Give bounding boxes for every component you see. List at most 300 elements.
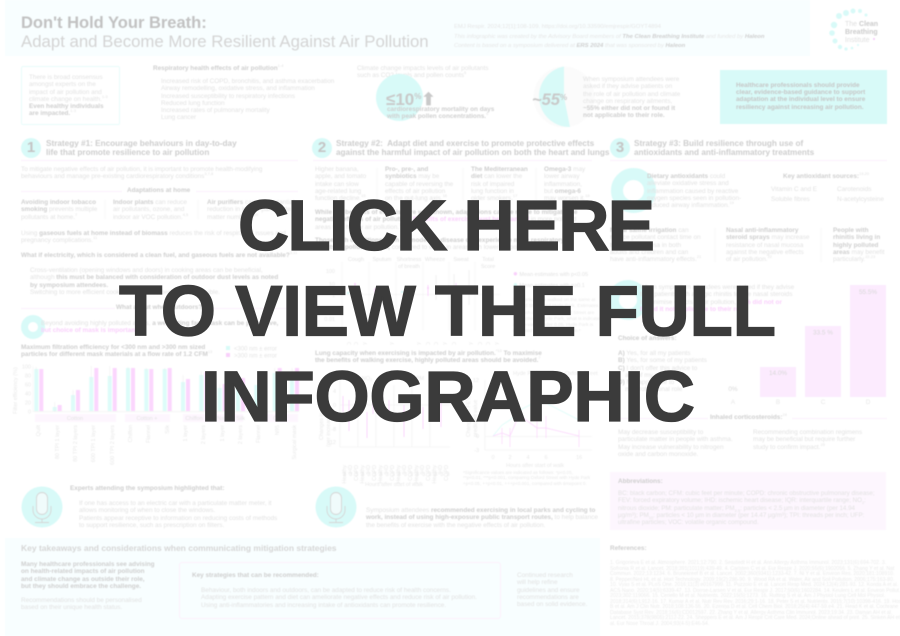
purifiers: Air purifiers cause substantial: [207, 199, 294, 206]
key takeaways band: [5, 538, 600, 636]
FEV change chart: IHD: [420, 465, 426, 474]
abbreviations text: FEV: forced expiratory volume; IHD: ischemic heart disease; IQR: interquartile range; NO2:: [618, 497, 866, 506]
urban symptoms text: Those with conditions such as moderate disease can experience more respiratory: [315, 237, 564, 244]
attendee question: [583, 76, 680, 119]
takeaways personalised text: Recommendations should be personalised: [21, 597, 142, 604]
strategy 3 heading: [634, 139, 814, 157]
citation text: EMJ Respir. 2024;12[1]:108-109. https://doi.org/10.33590/emjrespir/GOYT4894: [454, 24, 661, 30]
abbreviations text: nitrous dioxide; PM: particulate matter; PM2.5: particles < 2.5 µm in diameter (per 14.94: [618, 505, 855, 513]
key strategies list: Adapting exercise pattern and diet can ameliorate negative effects and reduce risk of air pollution.: [201, 594, 477, 601]
dietary antioxidants: inflammation caused by reactive: [647, 188, 738, 195]
mask chart: Chiffon: [185, 416, 203, 422]
antioxidant sources list 2: Carotenoids: [837, 186, 871, 193]
symptom footnote: Oxford Street and Hyde Park. Estimates: [513, 304, 598, 309]
symptom chart axis: [324, 269, 335, 323]
strategy 2 heading: Strategy #2: Adapt diet and exercise to promote protective effects: [336, 139, 594, 148]
probiotics: on the gut-lung axis.16: [385, 193, 447, 202]
antioxidant sources list 2: [837, 185, 884, 205]
FEV change chart: NO: [362, 376, 370, 382]
answer categories: [731, 399, 871, 406]
takeaways bold text: Many healthcare professionals see advising: [21, 561, 155, 568]
hours line chart: [466, 371, 598, 469]
consensus text: [29, 74, 108, 117]
symptom footnote: indicated as an alternative site.*: [513, 329, 581, 334]
answers heading: Choice of answers:: [618, 335, 677, 342]
symposium recommendation: Symposium attendees recommended exercising in local parks and cycling to: [366, 507, 595, 514]
FEV change chart: IHD: [438, 465, 444, 474]
steroid question: [640, 284, 794, 313]
callout text: resiliency against increasing air pollution.: [736, 104, 864, 111]
mediterranean diet: [471, 166, 528, 202]
mask chart labels: 80 TPI 1 layer: [55, 425, 61, 459]
takeaways bold text: on health-related impacts of air pollution: [21, 568, 145, 575]
continued research: recommendations are: [517, 594, 579, 601]
symptom chart headers: of breath: [398, 264, 420, 270]
references text: 8. Pepper/Neil HL et al. Hort Technology. 2009;19(2):286-90. 9. Wood RA et al. Water, Air and Soil Pollution. 2006;175:163-80.: [610, 576, 894, 582]
references text: 10. Vyas S et al. PLoS One. 2016;11(3):e0167999. 11. Puzzolo E et al. Lancet Resp Med. 2024;12(4):281-93. 12. Konda A et al.: [610, 582, 898, 588]
fruit intake: function decline.15: [315, 193, 366, 202]
strategy 3 number: 3: [616, 139, 624, 156]
answer values: 33.5 %: [813, 330, 833, 336]
takeaways bold text: and climate change as outside their role,: [21, 576, 145, 583]
answer categories: B: [776, 399, 780, 406]
symposium recommendation: [366, 507, 598, 529]
mask chart heading: [21, 344, 212, 358]
probiotics: effects of air pollution: [385, 188, 445, 195]
lung charts: [319, 371, 598, 488]
probiotics: capable of reversing the: [385, 181, 453, 188]
plants: Indoor plants can reduce: [113, 199, 187, 206]
attendee question: not applicable to their role.: [583, 112, 665, 119]
mask chart labels: 80 TPI 2 layers: [73, 425, 79, 462]
FEV change chart: IHD: [348, 465, 354, 474]
strategy 3 number: [610, 138, 630, 158]
references text: Sofronia R et al. Lancet. 2018;391(10119):439-49. 4. Carlsten C et al. Eur Respir J. 2020;55(6):1902056. 5. Zhang Y et al. Nat: [610, 566, 894, 572]
FEV change chart: Healthy: [342, 465, 348, 484]
respiratory effects list: Increased rates of pulmonary mortality: [161, 107, 270, 114]
symptom chart points: [355, 283, 456, 296]
references text: [610, 561, 900, 627]
strategy 1 intro: [21, 166, 262, 180]
mask chart labels: 2 layers: [238, 425, 244, 444]
lung capacity heading: [315, 348, 542, 364]
exercise text: [314, 209, 578, 231]
hours line chart: Oxford Street: [565, 371, 598, 377]
answers list: C) I don't offer this advice to: [618, 365, 697, 372]
mask chart labels: 600 TPI 2 layers: [110, 425, 116, 465]
answer categories: A: [731, 399, 736, 406]
electricity list: although this must be balanced with consideration of outdoor dust levels as noted: [30, 274, 278, 281]
FEV change chart: IHD: [366, 465, 372, 474]
key strategies heading: Key strategies that can be recommended:: [192, 572, 319, 579]
FEV change chart: COPD: [408, 465, 414, 481]
citation text: Content is based on a symposium delivered at ERS 2024 that was sponsored by Haleon: [454, 43, 685, 49]
mask chart axis: 0: [28, 410, 31, 416]
omega: inflammation,: [544, 181, 582, 188]
FEV change chart: PM: [416, 376, 425, 382]
mask chart labels: Silk: [165, 425, 171, 434]
tobacco: smoking prevents multiple: [21, 206, 97, 213]
respiratory effects list: [161, 78, 334, 121]
mask chart error bars: [33, 366, 299, 412]
corticosteroids note: [753, 429, 862, 451]
FEV change chart: -4: [331, 417, 336, 423]
abbreviations text: [618, 490, 875, 526]
references heading: References:: [610, 545, 647, 552]
references text: Lancet. 2015;378(9805):2112-22. 24. Sheppers E et al. Am J Respir Crit Care Med. 2024;Online ahead of print. 25. Sinken AH et: [610, 615, 900, 621]
corticosteroids list: [618, 429, 733, 458]
mask chart labels: Flannel: [256, 425, 262, 443]
answers list: A) Yes, for all my patients: [618, 350, 690, 357]
symptom chart axis: 100: [326, 269, 335, 275]
answer values: [728, 289, 877, 393]
symposium recommendation: work, instead of using high-exposure public transport routes, to help balance: [366, 514, 598, 521]
mask chart heading: particles for different mask materials at a flow rate of 1.2 CFM13: [21, 349, 212, 358]
corticosteroids note: Recommending combination regimens: [753, 429, 862, 436]
corticosteroids note: may be beneficial but require further: [753, 436, 855, 443]
mask text: [41, 320, 278, 334]
mask chart axis: [13, 364, 31, 416]
strategy 1 heading: life that promote resilience to air pollution: [46, 148, 209, 157]
corticosteroids list: particulate matter in people with asthma.: [618, 436, 733, 443]
nasal steroid: [726, 227, 809, 263]
symptom chart axis: 1: [332, 293, 335, 299]
mask chart axis: 60: [25, 382, 31, 388]
nasal saline: reduce pollutant contact time on: [610, 234, 701, 241]
takeaways personalised text: [21, 597, 142, 612]
hours line chart: -3: [474, 448, 479, 454]
FEV change chart: IHD: [402, 465, 408, 474]
FEV change chart: COPD: [426, 465, 432, 481]
FEV change chart: Healthy: [414, 465, 420, 484]
continued research: guidelines and ensure: [517, 587, 580, 594]
dietary antioxidants: oxygen species seen in pollution-: [647, 195, 741, 202]
antioxidant sources heading: Key antioxidant sources:19,20: [783, 171, 869, 180]
strategy 2 heading: [336, 139, 610, 157]
hours line chart: 16: [576, 455, 582, 461]
FEV change chart: IHD: [384, 465, 390, 474]
dietary antioxidants: induced airway inflammation.19: [647, 200, 734, 209]
attendee question: the role of air pollution and climate: [583, 91, 680, 98]
electricity list: [30, 267, 278, 296]
consensus text: amongst experts on the: [29, 81, 96, 88]
logo: Breathing: [845, 29, 878, 36]
purifiers: matter numbers.10: [207, 211, 258, 221]
climate text: Climate change impacts levels of air pollutants: [357, 65, 488, 72]
FEV change chart: (per increase): [326, 413, 332, 447]
panel: abbreviations: [610, 472, 886, 530]
FEV change chart: -8: [331, 427, 336, 433]
rhinitis: [833, 227, 885, 263]
steroid question: to minimise effects of air pollution, 89% did not or: [640, 299, 782, 306]
hours line chart: Hyde Park: [513, 371, 539, 377]
steroid question: When symposium attendees were asked if they advise: [640, 284, 794, 291]
strategy 3 heading: Strategy #3: Build resilience through use of: [634, 139, 803, 148]
takeaways bold text: [21, 561, 155, 590]
experts list: If one has access to an electric car with a particulate matter meter, it: [79, 500, 272, 507]
mask chart axis: 20: [25, 400, 31, 406]
antioxidant sources list: [771, 185, 817, 205]
symptom footnote: *All participants walked on the same at: [513, 298, 595, 303]
symptom chart headers: Score: [481, 264, 495, 270]
answers list: any of my patients: [625, 372, 677, 379]
mask ring: [21, 315, 45, 339]
pollen stat: ≤10%⬆: [386, 90, 436, 109]
antioxidant ring: [611, 168, 656, 213]
pollen circle: [376, 74, 423, 121]
mask chart labels: 2 layers: [201, 425, 207, 444]
references text: 1. Grigorieva E et al. Atmosphere. 2021;12:790. 2. Seastedt H et al. Ann Allergy Asthma Immunol. 2023;131(6):694-702. 3.: [610, 560, 886, 566]
tobacco: [21, 199, 97, 221]
mediterranean diet: diet can lower the: [471, 173, 522, 180]
mediterranean diet: lung function in: [471, 188, 514, 195]
mask chart labels: 1 layer: [220, 425, 226, 442]
key strategies list: [201, 587, 477, 609]
strategy 1 intro: behaviours and manage pre-existing cardiorespiratory conditions3,7,8: [21, 171, 213, 180]
answers list: B) Yes, for some of my patients: [618, 357, 707, 364]
probiotics: [385, 166, 453, 202]
attendee question: ~55% either did not or found it: [583, 105, 675, 112]
strategy 2 heading: against the harmful impact of air pollution on both the heart and lungs: [336, 148, 609, 157]
continued research: based on solid evidence.: [517, 601, 587, 608]
callout text: [736, 82, 866, 111]
strategy 1 heading: Strategy #1: Encourage behaviours in day-to-day: [46, 139, 237, 148]
symptom footnote: [513, 298, 602, 334]
symptom chart headers: Sweat: [453, 257, 469, 263]
omega: [544, 166, 590, 202]
symptom chart headers: Cough: [348, 257, 364, 263]
FEV change chart: 0: [333, 403, 336, 409]
FEV change chart: COPD: [390, 465, 396, 481]
FEV change chart: 4: [333, 389, 336, 395]
nasal steroid: against the negative effects: [726, 249, 804, 256]
nasal saline: Nasal saline irrigation can: [610, 227, 689, 234]
fruit intake: apple, and tomato: [315, 173, 366, 180]
electricity list: Switching to more efficient cookstoves can be beneficial if possible.: [30, 289, 220, 296]
attendee question: change on respiratory ailments,: [583, 98, 672, 105]
icon: microphone middle: [315, 486, 357, 528]
key takeaways heading: Key takeaways and considerations when communicating mitigation strategies: [21, 543, 337, 553]
FEV change chart: Healthy: [378, 465, 384, 484]
mask chart heading: Maximum filtration efficiency for <300 nm and >300 nm sized: [21, 344, 205, 351]
experts list: to support resilience, such as prescription on filters.: [79, 522, 224, 529]
mask text: but choice of mask is important.: [41, 327, 139, 334]
header band: [5, 0, 810, 56]
symptom chart axis: 0.01: [324, 317, 335, 323]
strategy 2 number: [312, 138, 332, 158]
symptom chart: [324, 257, 500, 345]
answers list: D) Not applicable to: [618, 379, 674, 386]
takeaways personalised text: based on their unique health status.: [21, 604, 122, 611]
omega: Omega-3 may: [544, 166, 585, 173]
hours line chart: 0: [491, 455, 495, 461]
key strategies list: Behaviour, both indoors and outdoors, can be adapted to reduce risk of health concerns.: [201, 587, 451, 594]
steroid question: found it not applicable to their role.: [640, 306, 747, 313]
rhinitis: areas may benefit: [833, 249, 885, 256]
dietary antioxidants: alleviate oxidative stress and: [647, 180, 729, 187]
references text: al. Eur Nose Throat J. 2004;93(4-5):E46-54.: [610, 620, 709, 626]
omega: lower airway: [544, 173, 580, 180]
FEV change chart: 2: [370, 377, 373, 382]
lung footnote: *Significance values are indicated as follows: *p<0.05,: [463, 470, 573, 475]
citation text: This infographic was created by the Advisory Board members of The Clean Breathing Institute and funded by Haleon: [454, 34, 764, 40]
mask chart bars: [34, 368, 294, 411]
references text: ACS Nano. 2020;14(5):6339-47. 13. Dorrse-Larsen V et al. Eur Respir J. 2017;50(6):1602284. 14. Keulers L et al. Environ Pollut.: [610, 588, 900, 594]
panel: consensus: [21, 66, 120, 125]
steroid ring: [608, 280, 648, 320]
callout text: clear, evidence-based guidance to support: [736, 89, 865, 96]
callout text: Healthcare professionals should provide: [736, 82, 860, 89]
antioxidant sources list 2: N-acetylcysteine: [837, 196, 884, 203]
answers list: my professional role: [625, 386, 682, 393]
nasal saline: [610, 227, 701, 263]
takeaways bold text: but they should embrace the challenge.: [21, 583, 141, 590]
symptom legend: ● Mean estimates with p<0.05: [513, 269, 588, 278]
mask chart: [13, 346, 300, 465]
answer values: 0%: [728, 386, 738, 393]
strategy 1 number: 1: [27, 139, 35, 156]
title: Don't Hold Your Breath:: [21, 14, 207, 32]
exercise text: areas with heavy air pollution.7: [315, 221, 401, 231]
mask chart: Natural Silk: [217, 416, 245, 422]
consensus text: impact of air pollution and: [29, 89, 102, 96]
nasal steroid: resistance of nasal mucosa: [726, 242, 803, 249]
corticosteroids list: May decrease susceptibility to: [618, 429, 703, 436]
consensus text: Even healthy individuals: [29, 103, 104, 110]
respiratory effects list: Increased susceptibility to respiratory infections: [161, 93, 295, 100]
outdoors heading: What about when outdoors?: [116, 304, 202, 311]
mask chart: Other: [273, 416, 287, 422]
mask chart axis: 80: [25, 374, 31, 380]
pie 55 percent: [538, 66, 570, 128]
nasal saline: the nasal mucosa in both: [610, 242, 681, 249]
mediterranean diet: older smokers.17: [471, 193, 517, 202]
symptom footnote: as a p-value under 0.05. Hyde Park is: [513, 323, 593, 328]
mask chart labels: Quilt: [36, 425, 42, 436]
subtitle: Adapt and Become More Resilient Against Air Pollution: [21, 32, 429, 51]
purifiers: [207, 199, 294, 221]
FEV change chart: Changes in exposure: [319, 388, 325, 440]
panel: key strategies: [179, 562, 501, 619]
symptom chart headers: Total: [482, 257, 494, 263]
references text: B et al. Am J Clin Nutr. 2018;108:136-55. 20. Ezeriņa D et al. Cell Chem Biol. 2018;25(4):447-59.e4. 21. Head K et al. Cochrane: [610, 604, 898, 610]
strategy 2 number: 2: [318, 139, 326, 156]
hours line chart: Hours after start of walk: [506, 463, 564, 469]
urban symptoms text: [315, 237, 564, 251]
callout text: adaptation at the individual level to ensure: [736, 96, 865, 103]
mask chart labels: 1 layer: [183, 425, 189, 442]
consensus text: are impacted.1-3: [29, 108, 76, 117]
bar chart: answers: [720, 280, 895, 410]
dietary antioxidants: Dietary antioxidants could: [647, 173, 725, 180]
lung capacity heading: the benefits of walking exercise, highly polluted areas should be avoided.7: [315, 355, 541, 364]
tobacco: Avoiding indoor tobacco: [21, 199, 96, 206]
answer values: 55.5%: [859, 289, 877, 296]
experts list: allows monitoring of when to close the windows.: [79, 507, 215, 514]
strategy 3 heading: antioxidants and anti-inflammatory treatments: [634, 148, 814, 157]
attendee question: asked if they advise patients on: [583, 83, 672, 90]
rhinitis: particularly.22,23: [833, 254, 875, 263]
citation text: [454, 24, 764, 49]
rhinitis: People with: [833, 227, 869, 234]
electricity list: Cross-ventilation (opening windows and doors) in cooking areas can be beneficial,: [30, 267, 263, 274]
hours line chart: 12: [473, 378, 479, 384]
FEV change chart: COPD: [372, 465, 378, 481]
symposium recommendation: the benefits of exercise with the negative effects of air pollution.: [366, 522, 545, 529]
corticosteroids list: May increase vulnerability to nitrogen: [618, 444, 724, 451]
symptom chart headers: Shortness: [397, 257, 422, 263]
plants: air pollutants, ozone, and: [113, 206, 184, 213]
plants: indoor air VOC pollution.4,5: [113, 211, 188, 221]
symptom chart axis: 10: [329, 282, 335, 288]
hours line chart: Changes in FEV,: [466, 395, 472, 437]
mask chart legend: >300 nm ± error: [234, 354, 277, 360]
symptom chart headers: Wheeze: [425, 257, 445, 263]
symptom chart headers: Sputum: [373, 257, 392, 263]
adaptations heading: Adaptations at home: [127, 187, 190, 194]
experts list: Patients appear receptive to information on reducing costs of methods: [79, 515, 277, 522]
strategy 1 intro: To mitigate negative effects of air pollution, it is important to promote health-modifying: [21, 166, 262, 173]
hours line chart: 0: [476, 434, 479, 440]
mask text: Beyond avoiding highly polluted areas, a well-fitting face mask can be protective,: [41, 320, 278, 327]
strategy 1 number: [21, 138, 41, 158]
pollen text: [386, 106, 494, 120]
hours line chart: predicted value: [473, 400, 479, 437]
logo: [829, 8, 878, 51]
nasal saline: have anti-inflammatory effects.21: [610, 254, 701, 263]
pollen text: cardiorespiratory mortality on days: [387, 106, 494, 113]
FEV change chart: -12: [328, 440, 336, 446]
abbreviations text: BC: black carbon; CFM: cubic feet per minute; COPD: chronic obstructive pulmonary disease;: [618, 490, 875, 497]
plants: [113, 199, 188, 221]
FEV change chart: COPD: [444, 465, 450, 481]
mask chart legend: [226, 346, 277, 360]
FEV change chart: Hours after start of walk: [365, 482, 423, 488]
symptom chart labels: [347, 342, 500, 361]
hours line chart: 6: [544, 455, 548, 461]
nasal steroid: steroid sprays may increase: [726, 234, 809, 241]
gaseous fuels: Using gaseous fuels at home instead of biomass reduces the risk of respiratory issues and: [21, 230, 286, 237]
symptom footnote: for each condition at Oxford Street are: [513, 311, 594, 316]
antioxidant sources list: Soluble fibres: [771, 196, 810, 203]
lung footnote: [463, 470, 590, 486]
abbreviations heading: Abbreviations:: [618, 478, 663, 485]
mediterranean diet: The Mediterranean: [471, 166, 528, 173]
mask chart labels: 600 TPI 1 layer: [91, 425, 97, 462]
gaseous fuels: [21, 230, 286, 244]
urban symptoms text: effects in polluted areas, compared to when in areas with lower air pollution: [315, 244, 533, 251]
pollen text: with peak pollen concentrations.6: [387, 111, 488, 120]
fruit intake: [315, 166, 366, 202]
fruit intake: Higher banana,: [315, 166, 359, 173]
references text: Commun. 2022;13:1234. 6. Brunekreef B et al. Lancet. 2002;360(9341):1233-42. 7. Ni Y et al. Environ Res. 2020;181:108910.: [610, 571, 894, 577]
hours line chart: 4: [526, 455, 530, 461]
experts list: [79, 500, 277, 529]
continued research: [517, 572, 587, 608]
mask chart: Cotton: [67, 416, 83, 422]
symptom legend: ● Mean estimates with p≥0.1: [513, 280, 585, 289]
mask chart labels: [36, 425, 298, 465]
respiratory effects list: Lung cancer: [161, 114, 196, 121]
abbreviations text: µg/m³); PM10: particles < 10 µm in diameter (per 14.47 µg/m³); TPI: threads per inch; UFP:: [618, 512, 864, 520]
key strategies list: Using anti-inflammatories and increasing intake of antioxidants can promote resilience.: [201, 602, 446, 609]
symptom legend: [513, 269, 588, 289]
answers list: [618, 350, 707, 394]
symptom footnote: respective to Hyde Park, what is indicated: [513, 317, 602, 322]
logo: The Clean: [845, 21, 878, 28]
overlay line 1: CLICK HERE: [238, 187, 655, 266]
FEV change chart: 3 3 3 3 3 3 3 3 3 3 3 3 3 3 3 3 3 3: [343, 472, 450, 478]
